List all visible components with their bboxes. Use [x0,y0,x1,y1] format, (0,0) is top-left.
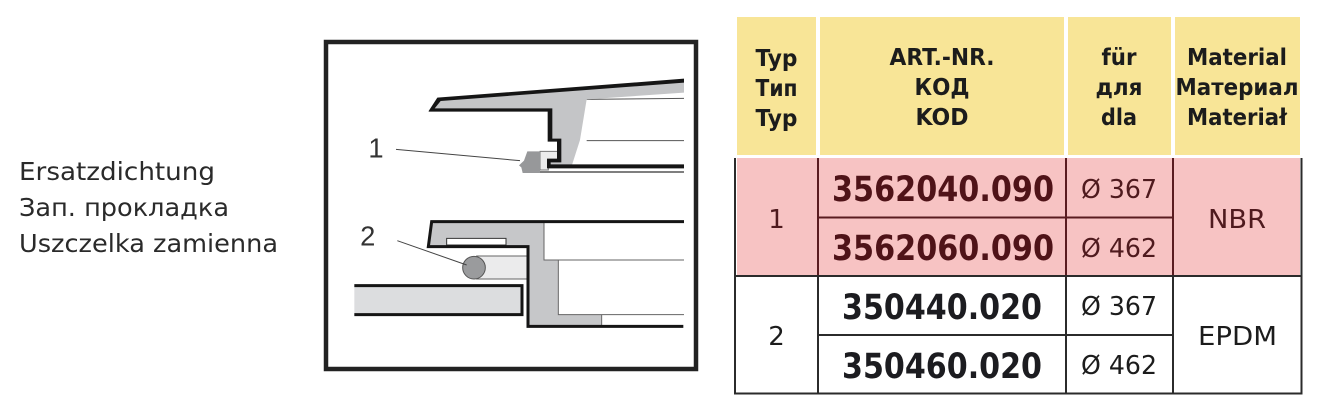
table header row: КОД [914,75,970,101]
row group 1: NBR: Ø 462 [1081,234,1157,264]
detail 2: lid with O-ring [354,220,684,326]
table header row: Material [1187,45,1287,71]
row group 2: EPDM: 2 [768,322,785,352]
row group 1: NBR: Ø 367 [1081,175,1157,205]
table header row: для [1096,75,1142,101]
table: article numbers [735,17,1302,394]
row group 1: NBR [737,158,1300,275]
table header row: Typ [756,106,798,132]
row group 2: EPDM: 350460.020 [842,347,1042,387]
row group 1: NBR: 1 [768,205,785,235]
text block: part name in three languages: Зап. прокладка [19,193,229,222]
table header row: dla [1101,105,1137,131]
row group 2: EPDM: Ø 367 [1081,292,1157,322]
row group 2: EPDM [768,276,1277,393]
leader line 2 [397,241,467,265]
row group 2: EPDM: Ø 462 [1081,351,1157,381]
detail 1: lid with replacement seal [368,79,684,173]
table header row: für [1102,45,1137,71]
row group 1: NBR: 3562040.090 [832,170,1054,210]
table header row: Typ [756,46,798,72]
table header row: Материал [1176,75,1298,101]
callout number 2: 2 [360,220,375,251]
panel: seal cross-section diagram [326,42,696,369]
text block: part name in three languages: Uszczelka zamienna [19,229,278,258]
table header row: Тип [756,76,798,102]
O-ring seal [463,256,485,279]
row group 1: NBR: NBR [1208,205,1266,235]
text block: part name in three languages [19,157,278,258]
table header row [737,17,1300,155]
row group 1: NBR: 3562060.090 [832,229,1054,269]
table header row: Materiał [1187,105,1287,131]
text block: part name in three languages: Ersatzdichtung [19,157,215,186]
diagram frame [326,42,696,369]
table header row: ART.-NR. [890,45,994,71]
row group 2: EPDM: EPDM [1198,322,1277,352]
table header row: KOD [916,105,968,131]
callout number 1: 1 [368,133,384,164]
row group 2: EPDM: 350440.020 [842,288,1042,328]
leader line 1 [396,149,520,161]
